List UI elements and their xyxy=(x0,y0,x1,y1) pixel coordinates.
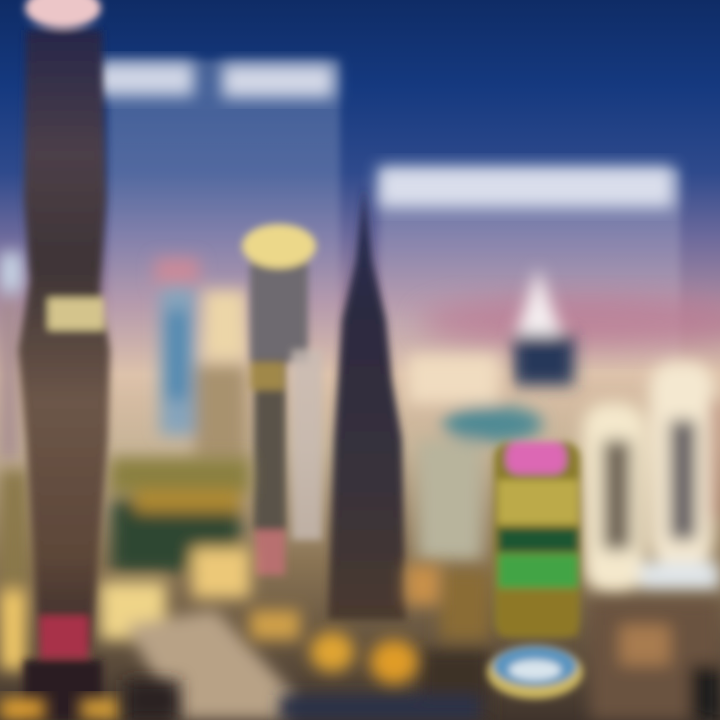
right cluster: pale curved towers xyxy=(583,362,720,593)
heading: right panel title bar xyxy=(378,166,674,208)
tower: mid-left with golden cap xyxy=(242,224,322,575)
right cluster: dome tower xyxy=(408,268,574,560)
pink horizon glow xyxy=(420,296,720,348)
ground right dark city xyxy=(125,570,720,720)
panel: left translucent panel xyxy=(46,60,340,400)
ground left glowing city xyxy=(0,458,295,720)
street lights at spire base xyxy=(250,565,440,684)
tower: tall left foreground xyxy=(0,0,120,720)
distant buildings left xyxy=(0,252,247,465)
panel: right translucent panel xyxy=(378,166,680,390)
heading: left panel title bar xyxy=(46,62,334,98)
skyscraper: central spire xyxy=(328,185,406,620)
tower: striped colourful building xyxy=(487,442,583,699)
oval sign at tower base xyxy=(487,645,583,699)
